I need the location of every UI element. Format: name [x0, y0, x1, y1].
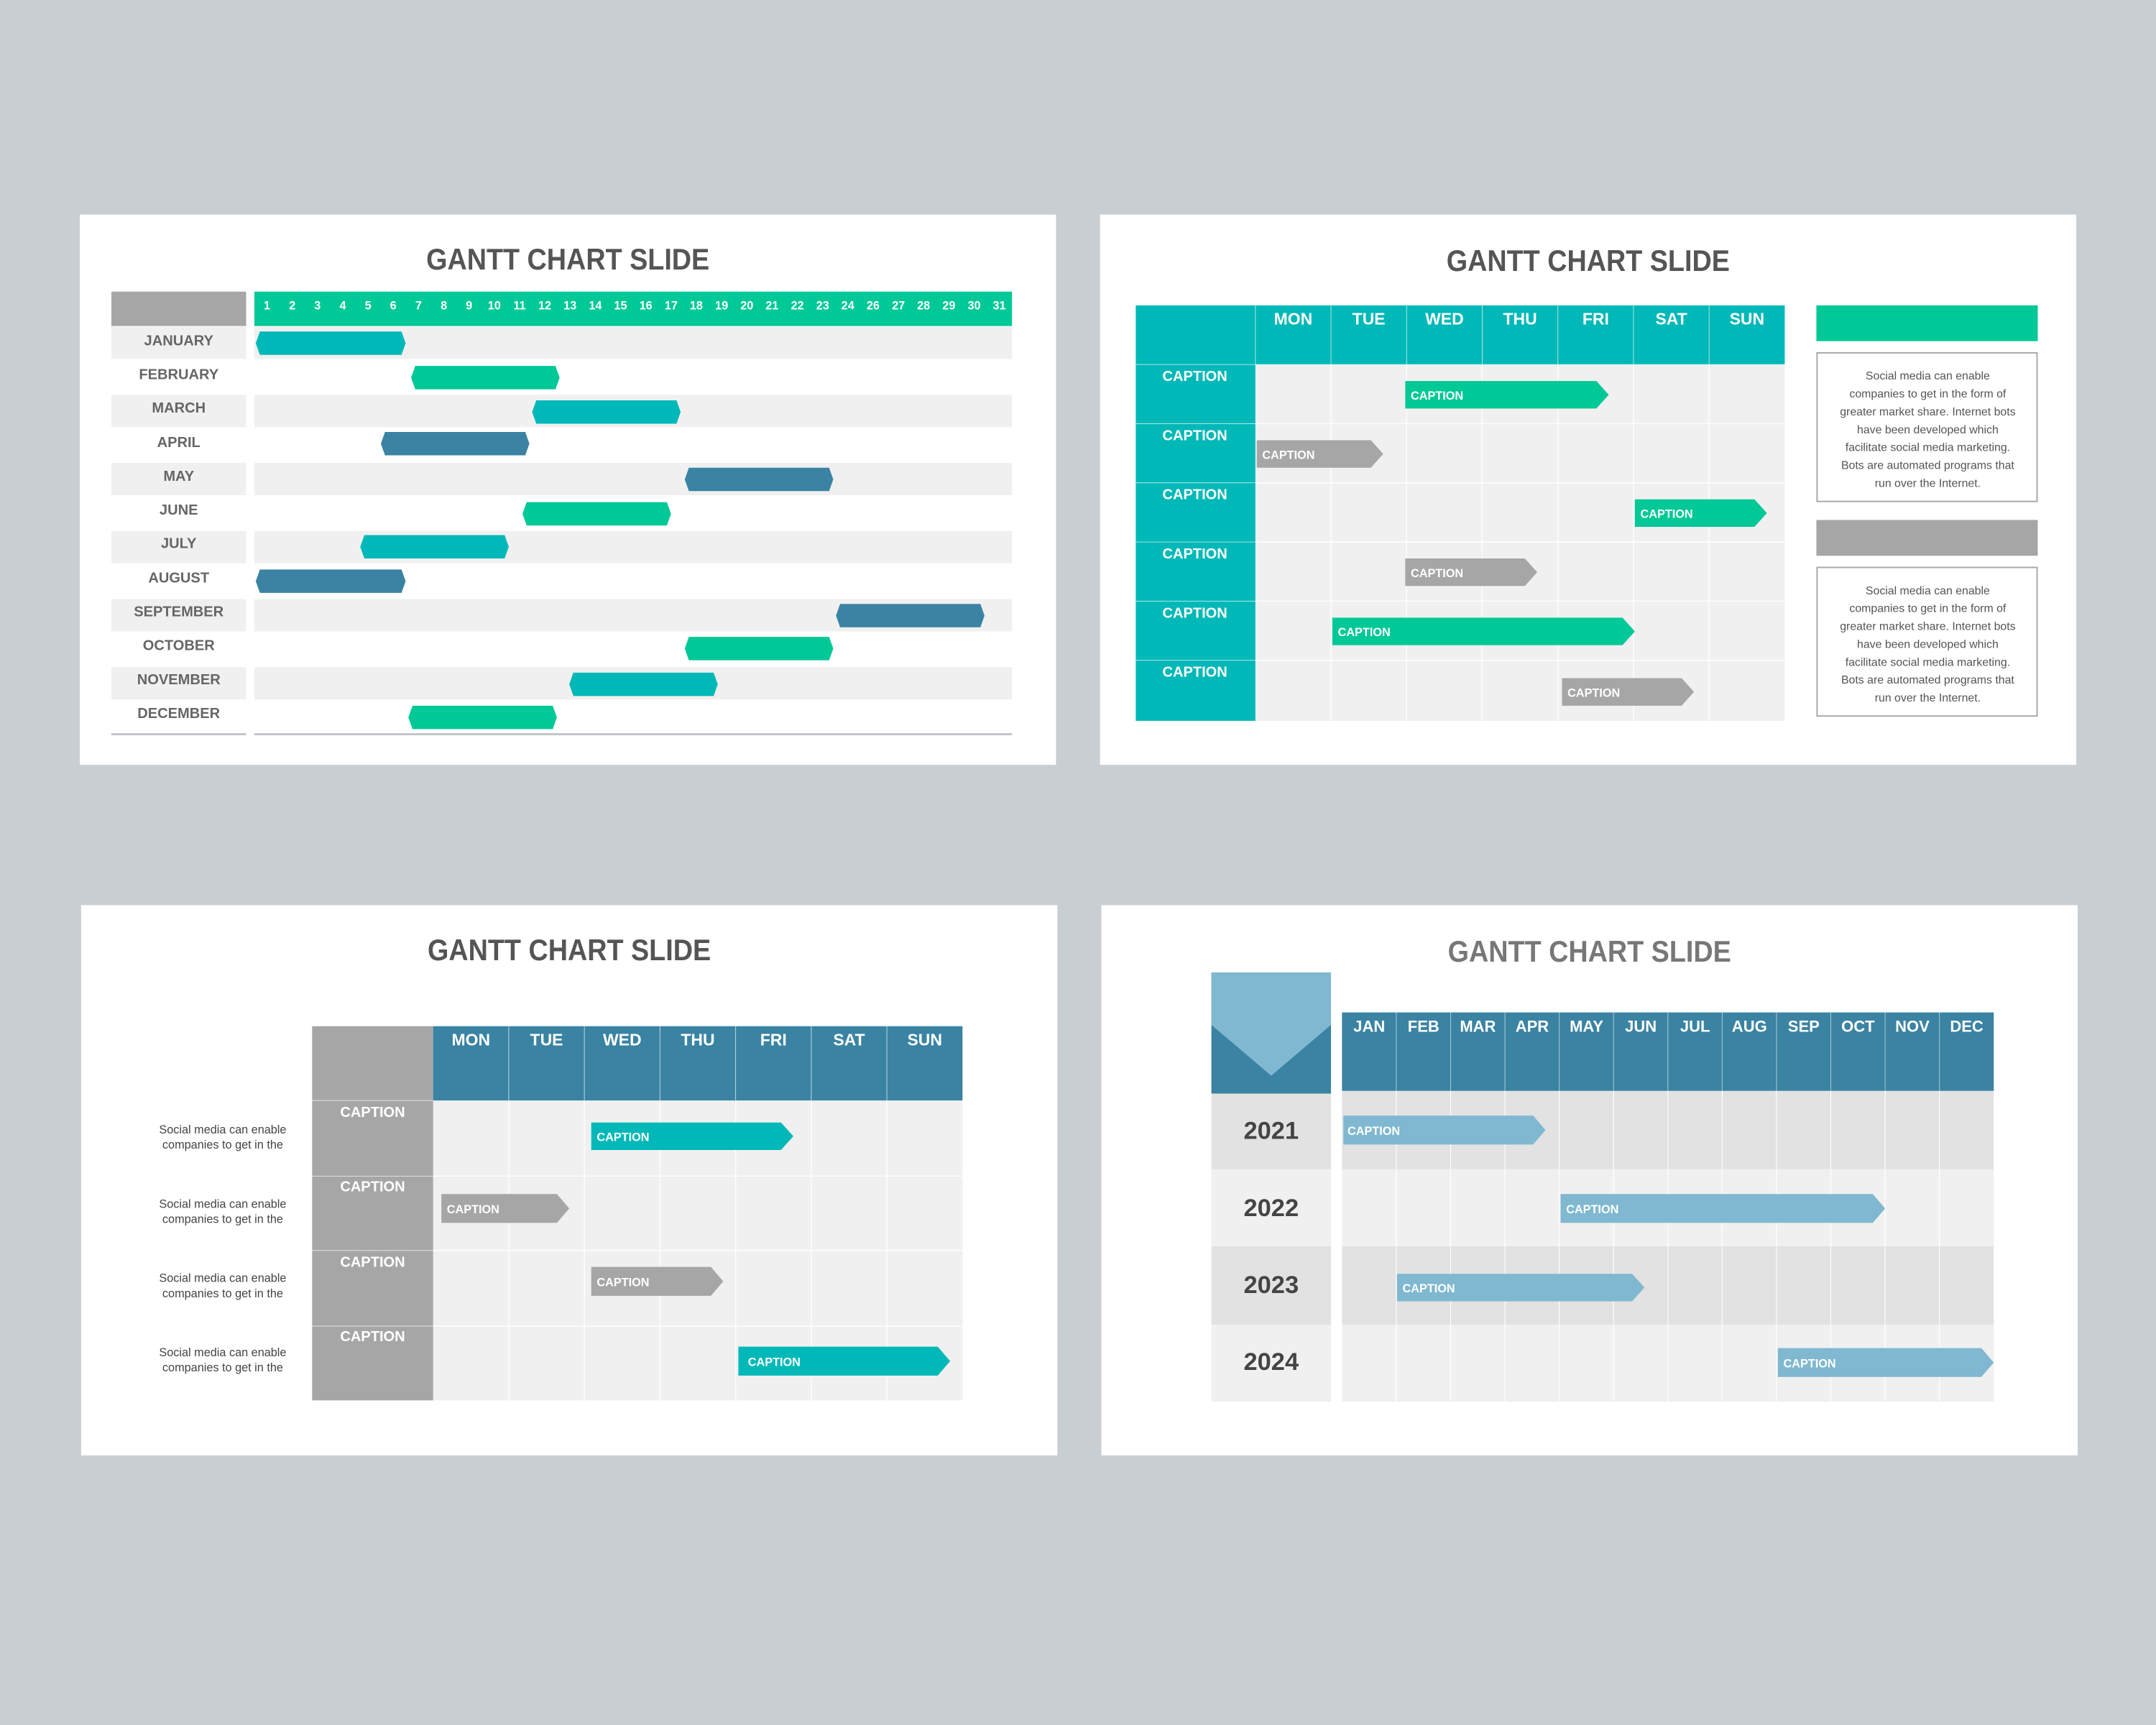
bars: weekly gantt blue: CAPTION [596, 1131, 649, 1144]
note: gray header [1816, 520, 2037, 556]
table: weekly grid: CAPTION [1162, 369, 1227, 385]
rows: months [111, 327, 1012, 735]
bars: weekly gantt blue: CAPTION [748, 1356, 801, 1368]
table: weekly grid: CAPTION [1162, 665, 1227, 681]
header: day numbers: 19 [715, 300, 728, 313]
header: day numbers: 9 [466, 300, 472, 313]
table: weekly grid: FRI [1583, 310, 1609, 328]
table: monthly grid: JAN [1353, 1017, 1385, 1035]
table: weekly grid [1135, 305, 1784, 721]
header: day numbers: 18 [690, 300, 703, 313]
panel: monthly gantt [80, 215, 1056, 765]
side text: row descriptions: Social media can enable [159, 1272, 286, 1285]
note box 2 [1817, 567, 2037, 716]
year labels: 2024 [1244, 1348, 1299, 1376]
note box 1 [1817, 353, 2037, 502]
title: panel 1: GANTT CHART SLIDE [426, 242, 709, 276]
bars: weekly gantt: CAPTION [1262, 448, 1314, 461]
note box 2: companies to get in the form of [1849, 603, 2007, 615]
table: weekly grid: SUN [1730, 310, 1764, 328]
table: weekly grid blue: MON [452, 1031, 490, 1049]
rows: months: JANUARY [144, 333, 213, 349]
rows: months: OCTOBER [143, 638, 215, 653]
table: monthly grid: MAY [1570, 1017, 1603, 1035]
side text: row descriptions: companies to get in the [162, 1287, 283, 1300]
header: day numbers: 11 [513, 300, 526, 313]
header: day numbers: 30 [968, 300, 981, 313]
bars: weekly gantt: CAPTION [1641, 508, 1693, 521]
panel: weekly gantt with side text [81, 905, 1057, 1455]
note box 1: greater market share. Internet bots [1840, 406, 2016, 418]
note box 2: greater market share. Internet bots [1840, 621, 2016, 633]
table: monthly grid: JUL [1680, 1017, 1710, 1035]
table: weekly grid: CAPTION [1162, 428, 1227, 443]
note box 2: Bots are automated programs that [1841, 674, 2014, 686]
panel: yearly gantt [1102, 905, 2078, 1455]
year labels: 2023 [1244, 1271, 1299, 1299]
header: day numbers: 20 [740, 300, 753, 313]
bars: yearly gantt: CAPTION [1403, 1282, 1455, 1295]
table: weekly grid: THU [1503, 310, 1537, 328]
table: monthly grid: NOV [1895, 1017, 1930, 1035]
table: monthly grid: MAR [1460, 1017, 1496, 1035]
side text: row descriptions: Social media can enable [159, 1346, 286, 1359]
table: monthly grid: FEB [1408, 1017, 1439, 1035]
rows: months: JULY [161, 536, 197, 552]
header: day numbers: 3 [314, 300, 321, 313]
icon: down chevron block [1212, 972, 1331, 1094]
table: weekly grid blue: CAPTION [340, 1329, 405, 1345]
rows: months: NOVEMBER [137, 672, 221, 688]
note box 1: facilitate social media marketing. [1846, 442, 2010, 454]
table: weekly grid blue: TUE [530, 1031, 563, 1049]
table: weekly grid blue: SUN [907, 1031, 942, 1049]
table: monthly grid: OCT [1841, 1017, 1875, 1035]
note box 1: Bots are automated programs that [1841, 460, 2014, 472]
note box 1: Social media can enable [1866, 370, 1990, 382]
bars: yearly gantt: CAPTION [1348, 1125, 1400, 1138]
table: weekly grid blue [312, 1026, 962, 1400]
table: monthly grid: APR [1516, 1017, 1549, 1035]
note box 2: Social media can enable [1866, 585, 1990, 597]
table: weekly grid blue: THU [681, 1031, 715, 1049]
year labels [1212, 1094, 1331, 1402]
header: day numbers: 5 [365, 300, 372, 313]
header: day numbers: 2 [289, 300, 295, 313]
side text: row descriptions: Social media can enable [159, 1123, 286, 1136]
table: weekly grid: CAPTION [1162, 487, 1227, 503]
header: day numbers: 8 [441, 300, 447, 313]
note box 1: companies to get in the form of [1849, 388, 2007, 400]
side text: row descriptions: companies to get in the [162, 1138, 283, 1151]
rows: months: MAY [163, 469, 195, 484]
side text: row descriptions: Social media can enable [159, 1197, 286, 1210]
header: day numbers: 10 [488, 300, 501, 313]
year labels: 2021 [1244, 1118, 1299, 1145]
rows: months: AUGUST [148, 571, 210, 586]
header: day numbers: 31 [993, 300, 1006, 313]
header: day numbers: 13 [563, 300, 576, 313]
table: weekly grid blue: WED [603, 1031, 642, 1049]
header: day numbers: 4 [339, 300, 346, 313]
table: monthly grid: DEC [1950, 1017, 1984, 1035]
header: day numbers: 6 [390, 300, 397, 313]
title: panel 3: GANTT CHART SLIDE [428, 933, 711, 967]
header: day numbers: 28 [917, 300, 930, 313]
bars: weekly gantt: CAPTION [1411, 390, 1463, 402]
side text: row descriptions: companies to get in the [162, 1213, 283, 1225]
table: weekly grid: SAT [1655, 310, 1687, 328]
table: weekly grid: TUE [1353, 310, 1386, 328]
bars: monthly gantt [256, 331, 985, 729]
table: weekly grid: CAPTION [1162, 605, 1227, 621]
bars: weekly gantt: CAPTION [1567, 686, 1620, 699]
table: weekly grid blue: CAPTION [340, 1255, 405, 1271]
rows: months: DECEMBER [137, 706, 221, 722]
header: day numbers: 14 [589, 300, 602, 313]
bars: yearly gantt: CAPTION [1784, 1357, 1836, 1370]
header: day numbers [111, 292, 1012, 326]
table: weekly grid blue: FRI [760, 1031, 787, 1049]
rows: months: JUNE [160, 502, 198, 518]
table: weekly grid: CAPTION [1162, 546, 1227, 562]
header: day numbers: 23 [816, 300, 829, 313]
header: day numbers: 27 [892, 300, 905, 313]
header: day numbers: 16 [640, 300, 653, 313]
year labels: 2022 [1244, 1195, 1299, 1222]
table: monthly grid: SEP [1788, 1017, 1820, 1035]
side text: row descriptions: companies to get in the [162, 1361, 283, 1374]
bars: yearly gantt: CAPTION [1566, 1203, 1618, 1216]
table: monthly grid [1342, 1013, 1994, 1402]
bars: weekly gantt: CAPTION [1338, 626, 1391, 639]
header: day numbers: 26 [867, 300, 880, 313]
header: day numbers: 29 [942, 300, 955, 313]
table: monthly grid: JUN [1625, 1017, 1657, 1035]
header: day numbers: 1 [264, 300, 270, 313]
note box 2: run over the Internet. [1875, 692, 1981, 704]
header: day numbers: 24 [842, 300, 854, 313]
table: weekly grid blue: CAPTION [340, 1179, 405, 1195]
bars: weekly gantt blue: CAPTION [447, 1203, 499, 1216]
note box 2: facilitate social media marketing. [1846, 656, 2010, 668]
bars: weekly gantt blue [441, 1123, 950, 1376]
rows: months: APRIL [157, 435, 201, 451]
note: green header [1816, 305, 2037, 341]
title: panel 4: GANTT CHART SLIDE [1448, 934, 1731, 968]
bars: weekly gantt [1257, 381, 1767, 706]
header: day numbers: 7 [415, 300, 422, 313]
note box 1: have been developed which [1857, 424, 1999, 436]
bars: weekly gantt blue: CAPTION [596, 1276, 649, 1289]
title: panel 2: GANTT CHART SLIDE [1447, 244, 1730, 277]
table: monthly grid: AUG [1732, 1017, 1767, 1035]
note box 1: run over the Internet. [1875, 478, 1981, 490]
header: day numbers: 15 [614, 300, 627, 313]
rows: months: SEPTEMBER [134, 604, 224, 620]
table: weekly grid blue: CAPTION [340, 1105, 405, 1121]
panel: weekly gantt with notes [1100, 215, 2076, 765]
bars: weekly gantt: CAPTION [1411, 567, 1463, 580]
side text: row descriptions [159, 1123, 286, 1374]
rows: months: MARCH [152, 400, 206, 416]
header: day numbers: 21 [765, 300, 778, 313]
header: day numbers: 17 [665, 300, 678, 313]
rows: months: FEBRUARY [139, 367, 219, 382]
bars: yearly gantt [1343, 1116, 1994, 1377]
header: day numbers: 22 [791, 300, 804, 313]
header: day numbers: 12 [538, 300, 551, 313]
table: weekly grid blue: SAT [833, 1031, 865, 1049]
table: weekly grid: WED [1425, 310, 1464, 328]
note box 2: have been developed which [1857, 638, 1999, 650]
table: weekly grid: MON [1274, 310, 1312, 328]
